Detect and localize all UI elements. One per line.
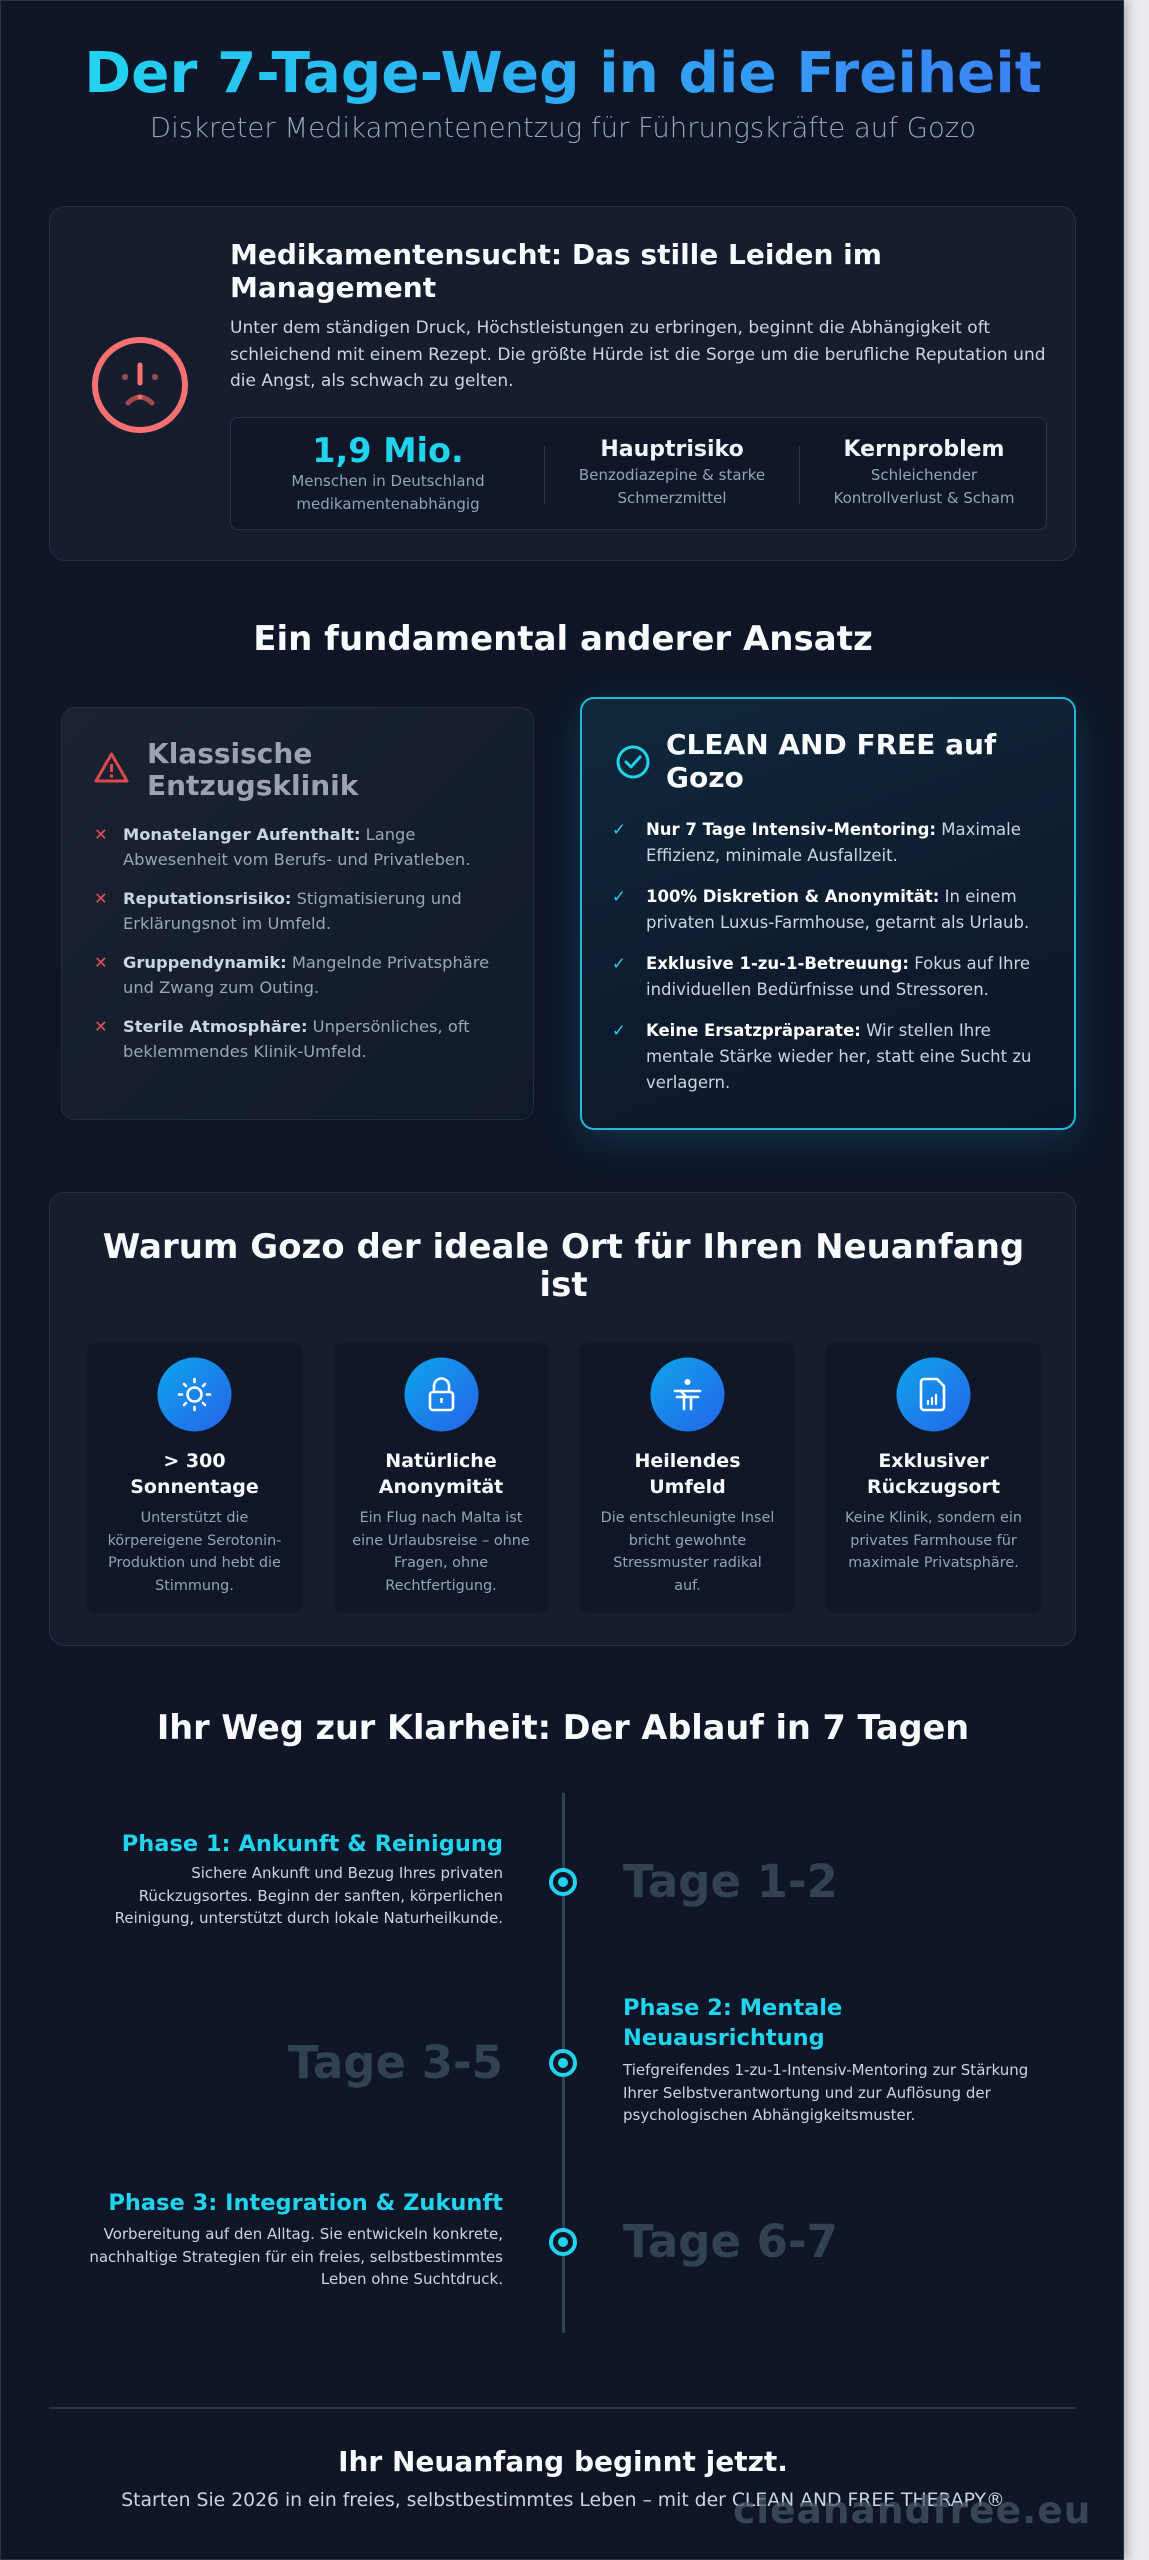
title: Der 7-Tage-Weg in die Freiheit — [84, 41, 1042, 106]
phase 3: nachhaltige Strategien für ein freies, selbstbestimmtes — [89, 2248, 503, 2266]
timeline dot 3 — [549, 2228, 577, 2256]
stat: Kernproblem: Schleichender — [871, 466, 977, 484]
stat: 1,9 Mio.: 1,9 Mio. — [312, 431, 464, 470]
panel: problem — [49, 206, 1076, 561]
heading: Warum Gozo der ideale Ort für Ihren Neuanfang — [103, 1227, 1024, 1267]
list: nachteile: ✕ — [94, 1017, 108, 1036]
list: vorteile — [612, 820, 1031, 1092]
list: nachteile: Sterile Atmosphäre: Unpersönliches, oft beklemmendes Klinik-Umfeld. — [123, 1017, 470, 1061]
phase 1: Sichere Ankunft und Bezug Ihres privaten Rückzugsortes. Beginn der sanften, körperlichen Reinigung, unterstützt durch lokale Naturheilkunde. — [115, 1864, 503, 1927]
heading: ist — [539, 1265, 588, 1305]
heading: Ansatz: Ein fundamental anderer Ansatz — [253, 619, 873, 659]
phase 3: Leben ohne Suchtdruck. — [321, 2270, 503, 2288]
stat: 1,9 Mio.: Menschen in Deutschland — [291, 472, 485, 490]
list: nachteile: Monatelanger Aufenthalt: Lange Abwesenheit vom Berufs- und Privatleben. — [123, 825, 470, 869]
label: Tage 3-5: Tage 3-5 — [288, 2036, 503, 2089]
phase 3: Vorbereitung auf den Alltag. Sie entwickeln konkrete, — [104, 2225, 503, 2243]
heading: Gozo — [666, 761, 744, 794]
list: vorteile: ✓ — [612, 887, 626, 906]
list: nachteile: Reputationsrisiko: Stigmatisierung und Erklärungsnot im Umfeld. — [123, 889, 462, 933]
icon: lock — [404, 1358, 478, 1432]
stat: Hauptrisiko: Hauptrisiko — [600, 437, 744, 462]
watermark: cleanandfree.eu — [733, 2488, 1091, 2532]
stats box — [230, 417, 1047, 530]
icon: sun — [158, 1358, 232, 1432]
list: nachteile: ✕ — [94, 889, 108, 908]
timeline — [89, 1793, 1028, 2333]
feature: Rückzugsort: Exklusiver — [878, 1450, 989, 1472]
list: nachteile: ✕ — [94, 825, 108, 844]
footer heading: Ihr Neuanfang beginnt jetzt. — [338, 2445, 788, 2478]
label: Tage 6-7: Tage 6-7 — [623, 2215, 838, 2268]
icon: warning — [94, 752, 129, 782]
footer text: Starten Sie 2026 in ein freies, selbstbestimmtes Leben – mit der CLEAN AND FREE THERAPY® — [121, 2490, 1005, 2511]
text block: Unter dem ständigen Druck, Höchstleistungen zu erbringen, beginnt die Abhängigkeit oft schleichend mit einem Rezept. Die größte Hürde ist die Sorge um die berufliche Reputation und die Angst, als schwach zu gelten. — [230, 318, 1046, 391]
feature: Rückzugsort: Rückzugsort — [867, 1476, 1000, 1498]
heading: Ablauf: Ihr Weg zur Klarheit: Der Ablauf in 7 Tagen — [157, 1708, 969, 1747]
heading — [666, 728, 996, 794]
phase 1: Phase 1: Ankunft & Reinigung — [122, 1831, 503, 1857]
list: vorteile: Keine Ersatzpräparate: Wir stellen Ihre mentale Stärke wieder her, statt eine Sucht zu verlagern. — [646, 1021, 1031, 1092]
phase 2: Tiefgreifendes 1-zu-1-Intensiv-Mentoring zur Stärkung Ihrer Selbstverantwortung und zur Auflösung der psychologischen Abhängigkeitsmuster. — [623, 2061, 1028, 2124]
heading: Medikamentensucht: Das stille Leiden im Management — [230, 238, 882, 304]
feature: Sonnentage: Sonnentage — [130, 1476, 259, 1498]
timeline dot 2 — [549, 2049, 577, 2077]
phase 2: Neuausrichtung — [623, 2025, 825, 2051]
icon: document chart — [896, 1358, 970, 1432]
list: vorteile: Exklusive 1-zu-1-Betreuung: Fokus auf Ihre individuellen Bedürfnisse und Stressoren. — [646, 954, 1030, 999]
feature: Umfeld — [580, 1343, 795, 1613]
feature: Sonnentage — [87, 1343, 302, 1613]
panel: klassische Klinik — [61, 707, 534, 1120]
feature: Anonymität: Natürliche — [385, 1450, 497, 1472]
list: vorteile: ✓ — [612, 1021, 626, 1040]
icon: person at table — [650, 1358, 724, 1432]
heading: Entzugsklinik — [147, 769, 358, 802]
feature: Umfeld: Die entschleunigte Insel bricht gewohnte Stressmuster radikal auf. — [601, 1510, 774, 1594]
heading: Klassische — [147, 737, 312, 770]
stat: Kernproblem: Kernproblem — [844, 437, 1004, 462]
feature: Anonymität — [334, 1343, 548, 1613]
list: vorteile: ✓ — [612, 820, 626, 839]
list: nachteile: Gruppendynamik: Mangelnde Privatsphäre und Zwang zum Outing. — [123, 953, 489, 997]
feature: Sonnentage: > 300 — [163, 1450, 226, 1472]
label: Tage 1-2: Tage 1-2 — [623, 1855, 838, 1908]
heading — [103, 1227, 1024, 1305]
list: nachteile — [94, 825, 489, 1061]
phase 3 — [89, 2190, 503, 2288]
stat: Hauptrisiko — [579, 437, 765, 507]
feature: Anonymität: Ein Flug nach Malta ist eine Urlaubsreise – ohne Fragen, ohne Rechtfertigung. — [352, 1510, 530, 1594]
heading: CLEAN AND FREE auf — [666, 728, 996, 761]
stat: Hauptrisiko: Benzodiazepine & starke — [579, 466, 765, 484]
phase 2: Phase 2: Mentale — [623, 1995, 842, 2021]
stat: Kernproblem — [834, 437, 1014, 507]
panel: CLEAN AND FREE — [580, 697, 1076, 1130]
stat: 1,9 Mio.: medikamentenabhängig — [296, 495, 480, 513]
feature: Rückzugsort: Keine Klinik, sondern ein privates Farmhouse für maximale Privatsphäre. — [845, 1510, 1022, 1571]
icon: check circle — [616, 746, 650, 778]
heading — [147, 737, 359, 802]
panel: Warum Gozo — [49, 1192, 1076, 1646]
stat: 1,9 Mio. — [291, 431, 485, 513]
feature: Anonymität: Anonymität — [379, 1476, 503, 1498]
phase 1 — [115, 1831, 503, 1927]
phase 3: Phase 3: Integration & Zukunft — [108, 2190, 503, 2216]
feature: Umfeld: Umfeld — [649, 1476, 726, 1498]
feature: Umfeld: Heilendes — [634, 1450, 741, 1472]
icon: sad face — [92, 337, 188, 433]
stat: Hauptrisiko: Schmerzmittel — [617, 489, 727, 507]
list: nachteile: ✕ — [94, 953, 108, 972]
list: vorteile: ✓ — [612, 954, 626, 973]
subtitle: Diskreter Medikamentenentzug für Führungskräfte auf Gozo — [150, 112, 976, 144]
phase 2 — [622, 1995, 1028, 2124]
feature: Rückzugsort — [826, 1343, 1041, 1613]
stat: Kernproblem: Kontrollverlust & Scham — [834, 489, 1014, 507]
list: vorteile: Nur 7 Tage Intensiv-Mentoring: Maximale Effizienz, minimale Ausfallzeit. — [646, 820, 1021, 865]
feature: Sonnentage: Unterstützt die körpereigene Serotonin-Produktion und hebt die Stimmung. — [108, 1510, 281, 1594]
list: vorteile: 100% Diskretion & Anonymität: In einem privaten Luxus-Farmhouse, getarnt als Urlaub. — [646, 887, 1029, 932]
timeline dot 1 — [549, 1868, 577, 1896]
